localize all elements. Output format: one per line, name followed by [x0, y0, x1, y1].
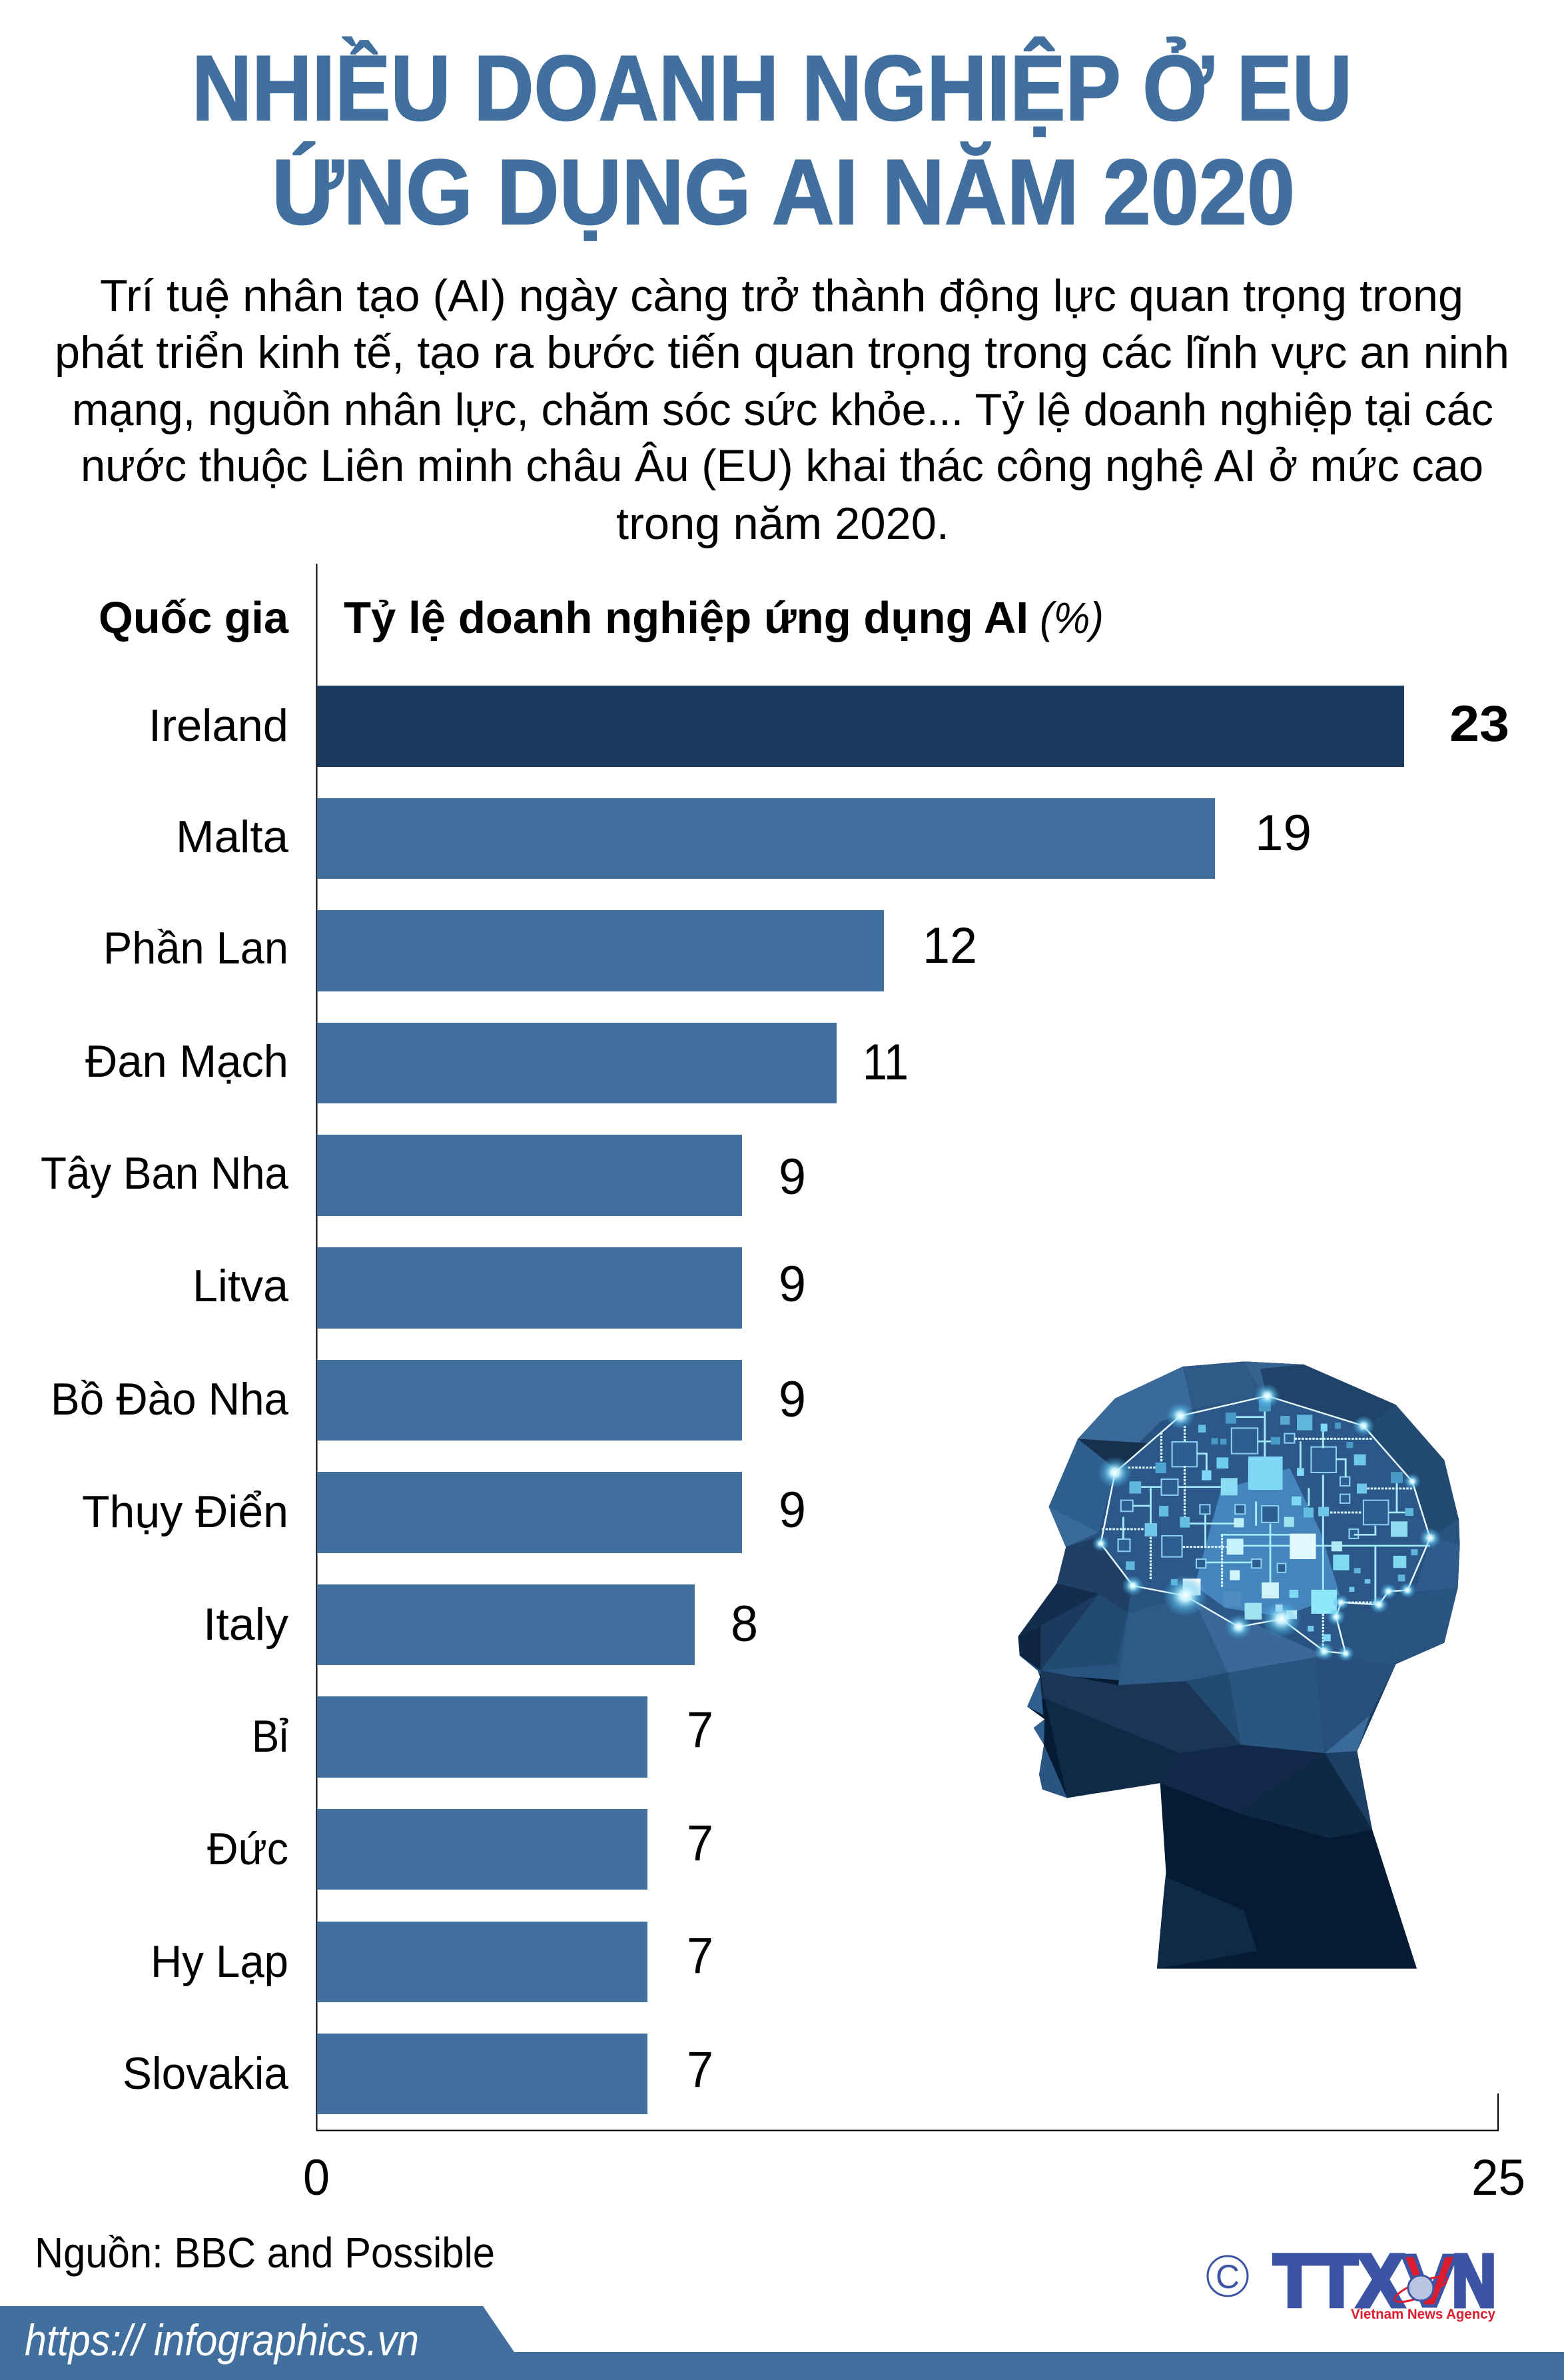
- row: Ireland: Ireland: [149, 700, 288, 751]
- dotted traces: [1102, 1426, 1412, 1651]
- logo: TTXVN: [1208, 2240, 1496, 2322]
- footer banner: https:// infographics.vn: [25, 2315, 419, 2365]
- row: Phần Lan: 12: [923, 917, 977, 974]
- intro text block: trong năm 2020.: [616, 498, 949, 549]
- row: Litva: 9: [779, 1256, 806, 1313]
- intro text block: nước thuộc Liên minh châu Âu (EU) khai thác công nghệ AI ở mức cao: [81, 440, 1483, 491]
- row: Đan Mạch: 11: [863, 1034, 909, 1091]
- row: Ireland: 23: [1449, 696, 1509, 752]
- chips: [1248, 1457, 1283, 1490]
- title: ỨNG DỤNG AI NĂM 2020: [272, 141, 1295, 244]
- logo wordmark: Vietnam News Agency: [1351, 2307, 1495, 2322]
- row: Hy Lạp: 7: [687, 1928, 713, 1984]
- icon: copyright: [1208, 2256, 1248, 2296]
- row: Tây Ban Nha: Tây Ban Nha: [41, 1148, 288, 1199]
- row: Malta: 19: [1255, 805, 1312, 862]
- row: Thụy Điển: [82, 1472, 806, 1553]
- logo wordmark: [1274, 2240, 1496, 2322]
- bar chart: [41, 564, 1525, 2206]
- row: Tây Ban Nha: 9: [779, 1149, 806, 1205]
- title: NHIỀU DOANH NGHIỆP Ở EU: [192, 36, 1352, 140]
- row: Bồ Đào Nha: [51, 1360, 806, 1441]
- logo wordmark: TTX: [1274, 2240, 1403, 2322]
- intro text block: Trí tuệ nhân tạo (AI) ngày càng trở thành động lực quan trọng trong: [100, 271, 1463, 321]
- intro text block: [55, 271, 1509, 549]
- row: Slovakia: Slovakia: [123, 2048, 288, 2099]
- column headers: Quốc gia: [99, 593, 289, 643]
- row: Đức: 7: [687, 1815, 713, 1872]
- row: Thụy Điển: 9: [779, 1482, 806, 1538]
- traces: [1123, 1411, 1430, 1604]
- axis labels: 25: [1471, 2149, 1525, 2206]
- row: Phần Lan: Phần Lan: [103, 923, 288, 973]
- column headers: Tỷ lệ doanh nghiệp ứng dụng AI: [344, 593, 1028, 643]
- row: Đức: [207, 1809, 713, 1890]
- row: Bỉ: 7: [687, 1702, 713, 1758]
- axis labels: 0: [303, 2149, 330, 2206]
- logo wordmark: V: [1402, 2240, 1457, 2322]
- axis labels: [303, 2149, 1525, 2206]
- row: Bồ Đào Nha: 9: [779, 1371, 806, 1428]
- row: Italy: 8: [731, 1596, 758, 1652]
- row: Thụy Điển: Thụy Điển: [82, 1487, 288, 1537]
- icon: copyright: C: [1216, 2258, 1240, 2295]
- row: Đan Mạch: [85, 1023, 909, 1103]
- head facets: [1012, 1354, 1463, 1974]
- row: Slovakia: 7: [687, 2042, 713, 2098]
- brain circuit: [1092, 1384, 1441, 1662]
- row: Đan Mạch: Đan Mạch: [85, 1036, 288, 1087]
- row: Malta: [176, 798, 1312, 879]
- row: Phần Lan: [103, 910, 977, 991]
- source note: Nguồn: BBC and Possible: [35, 2229, 495, 2277]
- brain outline: [1100, 1396, 1430, 1654]
- row: Litva: [193, 1247, 806, 1329]
- row: Italy: Italy: [203, 1599, 288, 1650]
- chart axes: [317, 564, 1498, 2131]
- column headers: (%): [1040, 593, 1104, 642]
- row: Litva: Litva: [193, 1261, 288, 1311]
- illustration: low-poly head with circuit brain: [1012, 1354, 1463, 1974]
- row: Đức: Đức: [207, 1824, 288, 1874]
- intro text block: phát triển kinh tế, tạo ra bước tiến quan trọng trong các lĩnh vực an ninh: [55, 327, 1509, 378]
- row: Malta: Malta: [176, 812, 288, 862]
- row: Hy Lạp: [151, 1922, 713, 2002]
- column headers: [99, 593, 1104, 643]
- logo wordmark: N: [1452, 2240, 1496, 2322]
- row: Ireland: [149, 686, 1509, 767]
- intro text block: mạng, nguồn nhân lực, chăm sóc sức khỏe... Tỷ lệ doanh nghiệp tại các: [72, 384, 1493, 435]
- glowing nodes: [1092, 1384, 1441, 1662]
- hollow chips: [1118, 1428, 1388, 1572]
- row: Hy Lạp: Hy Lạp: [151, 1936, 288, 1987]
- row: Italy: [203, 1584, 758, 1665]
- footer banner: [0, 2306, 1564, 2380]
- row: Tây Ban Nha: [41, 1135, 806, 1216]
- title: [192, 36, 1352, 244]
- row: Slovakia: [123, 2034, 713, 2114]
- row: Bỉ: Bỉ: [252, 1711, 288, 1762]
- row: Bồ Đào Nha: Bồ Đào Nha: [51, 1374, 288, 1425]
- row: Bỉ: [252, 1696, 713, 1778]
